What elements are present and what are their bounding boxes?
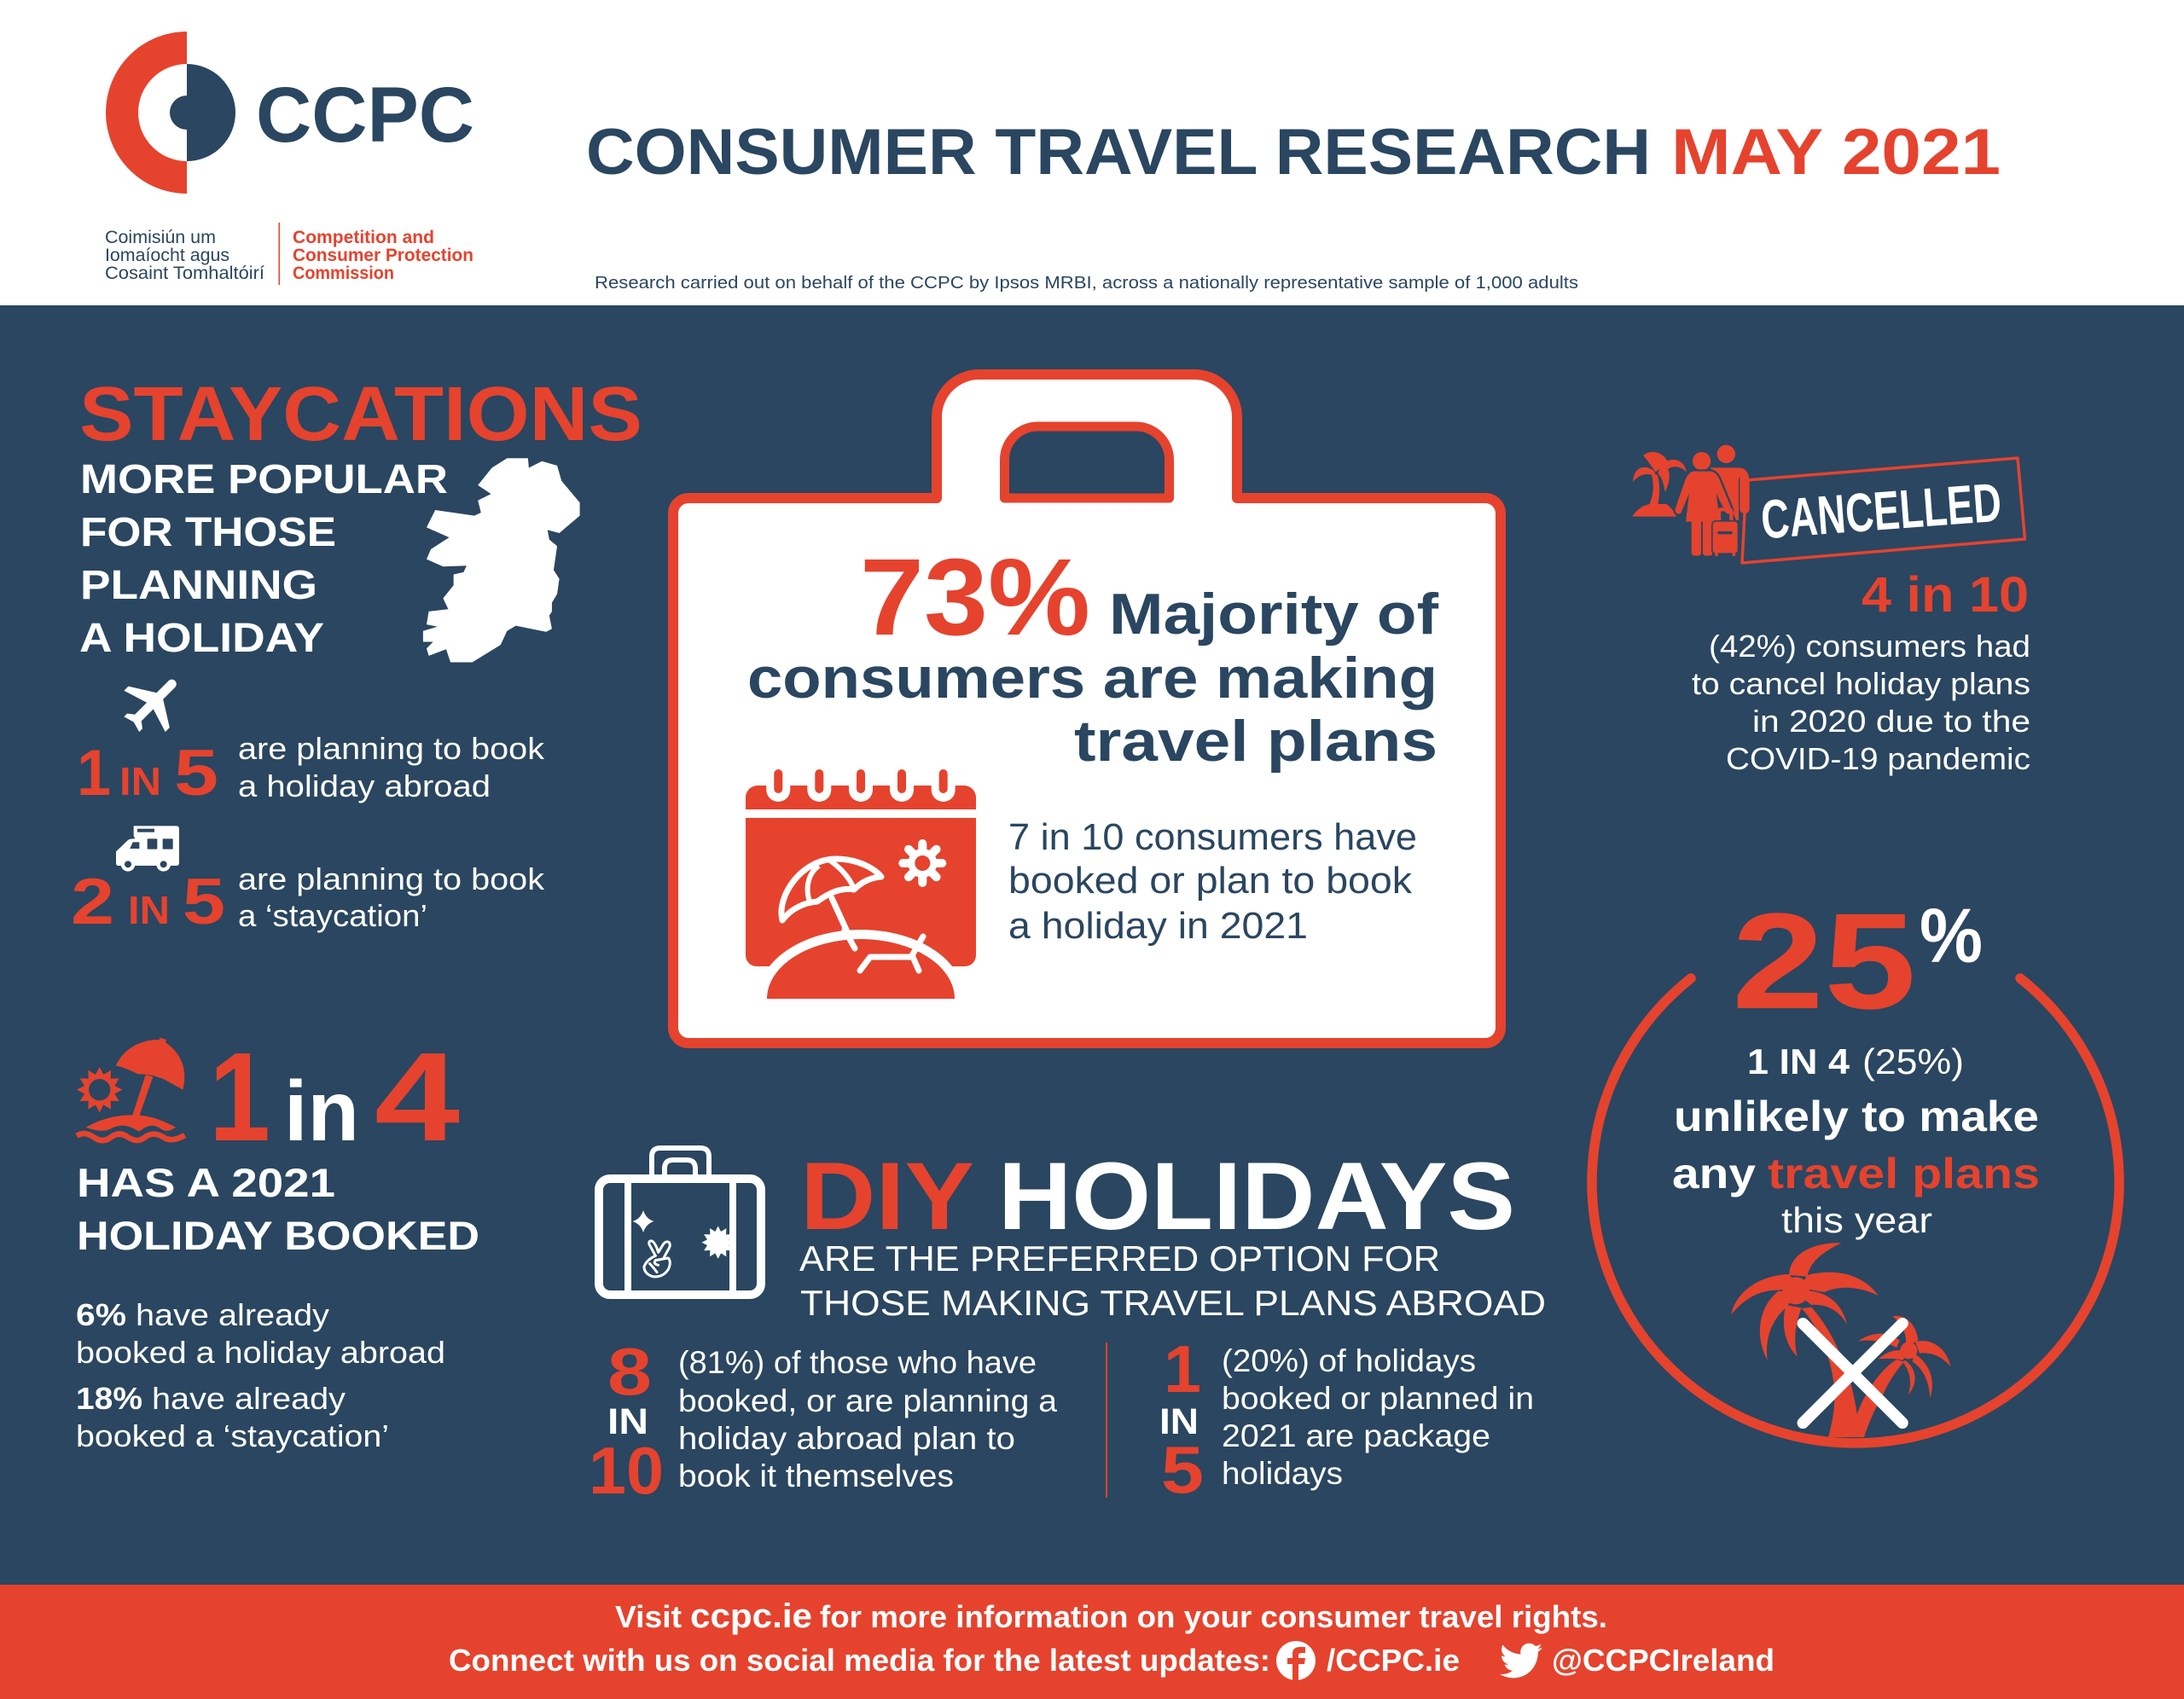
- stat: 4 in 10: 4 in 10: [1862, 567, 2029, 623]
- suitcase handle opening: [1005, 426, 1169, 498]
- text: unlikely to make travel plans: any: [1672, 1150, 1756, 1197]
- footer text: facebook handle: /CCPC.ie: [1327, 1643, 1460, 1678]
- stat: 1 in 5 abroad: IN: [119, 759, 161, 803]
- text: 6% and 18% booked: 6%: [76, 1297, 126, 1332]
- suitcase outline: [673, 374, 1501, 1043]
- text: 42% cancelled: in 2020 due to the: [1752, 704, 2030, 739]
- text: 42% cancelled: COVID-19 pandemic: [1726, 741, 2030, 776]
- text: 6% and 18% booked: 18%: [76, 1381, 142, 1416]
- text: unlikely to make travel plans: unlikely to make: [1674, 1093, 2039, 1140]
- icon: palm tree and travellers: [1632, 445, 1750, 556]
- heading: DIY holidays: [800, 1143, 1515, 1250]
- heading: has a 2021 holiday booked: [77, 1160, 479, 1258]
- stat: 1 in 5 abroad: 1: [77, 737, 111, 809]
- stat: 2 in 5 staycation: [71, 861, 545, 938]
- icon: twitter: [1500, 1644, 1542, 1678]
- ring arc: [1592, 978, 2119, 1443]
- text: 20% package holidays: booked or planned in: [1222, 1381, 1534, 1416]
- title: CONSUMER TRAVEL RESEARCH: [586, 116, 1651, 188]
- text: unlikely to make travel plans: 1 IN 4: [1747, 1041, 1850, 1081]
- text: 81% book themselves: booked, or are planning a: [678, 1383, 1057, 1418]
- icon: map of Ireland: [423, 458, 580, 663]
- text: 81% book themselves: holiday abroad plan to: [678, 1421, 1015, 1456]
- panel: suitcase 73%: [673, 374, 1501, 1043]
- stat: 8 in 10: 10: [589, 1433, 664, 1508]
- text: 81% book themselves: [678, 1345, 1057, 1493]
- icon: suitcase with stickers: [599, 1148, 761, 1296]
- stat: 1 in 5: [1159, 1331, 1204, 1507]
- logo: CCPC: [105, 32, 474, 285]
- heading: 73% majority: 73%: [860, 536, 1090, 658]
- stat: 1 in 5: 1: [1164, 1331, 1201, 1406]
- heading: 73% majority: [747, 536, 1438, 774]
- text: 20% package holidays: 2021 are package: [1222, 1418, 1490, 1453]
- research note: Research carried out on behalf of the CCPC by Ipsos MRBI, across a nationally representative sample of 1,000 adults: [595, 274, 1578, 293]
- stat: 8 in 10: 8: [607, 1334, 652, 1409]
- text: 81% book themselves: book it themselves: [678, 1458, 954, 1493]
- footer text: visit ccpc.ie: Visit: [615, 1599, 682, 1634]
- stat: 25%: [1732, 884, 1983, 1037]
- heading: DIY holidays: HOLIDAYS: [998, 1143, 1515, 1250]
- text: unlikely to make travel plans: this year: [1781, 1200, 1932, 1240]
- text: 6% and 18% booked: [76, 1297, 445, 1453]
- heading: staycations: STAYCATIONS: [79, 372, 642, 457]
- subheading: preferred option: [799, 1238, 1546, 1323]
- footer band: [0, 1585, 2184, 1699]
- stat: 8 in 10: IN: [607, 1401, 648, 1442]
- subheading: more popular: A HOLIDAY: [79, 616, 324, 661]
- logo: CCPC: Iomaíocht agus: [105, 246, 229, 265]
- text: unlikely to make travel plans: travel plans: [1768, 1150, 2040, 1197]
- stat: 1 in 5 abroad: a holiday abroad: [238, 768, 491, 803]
- icon: plane: [111, 660, 195, 745]
- title: MAY 2021: [1671, 116, 2001, 188]
- text: 6% and 18% booked: booked a holiday abroad: [76, 1335, 445, 1370]
- footer text: twitter handle: @CCPCIreland: [1552, 1643, 1774, 1678]
- panel: DIY holidays: [589, 1143, 1546, 1508]
- stat: 1 in 5: IN: [1159, 1401, 1199, 1442]
- icon: beach umbrella and sun: [77, 1038, 185, 1140]
- logo: CCPC: Consumer Protection: [293, 246, 473, 265]
- subheading: preferred option: THOSE MAKING TRAVEL PLANS ABROAD: [800, 1283, 1546, 1323]
- logo: CCPC: Coimisiún um: [105, 228, 216, 247]
- text: 6% and 18% booked: have already: [136, 1297, 329, 1332]
- text: 42% cancelled: to cancel holiday plans: [1692, 666, 2030, 701]
- text: 7 in 10 consumers: a holiday in 2021: [1008, 905, 1308, 947]
- text: 42% cancelled: [1692, 629, 2030, 776]
- text: 7 in 10 consumers: 7 in 10 consumers have: [1008, 816, 1417, 858]
- panel: cancelled: [1632, 445, 2030, 776]
- stat: 2 in 5 staycation: a ‘staycation’: [238, 898, 427, 933]
- stat: 1 in 4: [209, 1027, 460, 1168]
- stat: 2 in 5 staycation: IN: [128, 888, 170, 932]
- subheading: more popular: FOR THOSE: [80, 510, 336, 555]
- heading: 73% majority: consumers are making: [747, 646, 1438, 710]
- stat: 25%: 25: [1732, 884, 1916, 1037]
- icon: crossed-out palm trees: [1731, 1243, 1951, 1437]
- icon: facebook: [1276, 1641, 1316, 1680]
- heading: 73% majority: travel plans: [1074, 709, 1438, 774]
- text: 7 in 10 consumers: booked or plan to book: [1008, 860, 1413, 902]
- logo: CCPC: CCPC: [256, 72, 474, 159]
- text: 81% book themselves: (81%) of those who have: [678, 1345, 1037, 1380]
- stat: 2 in 5 staycation: are planning to book: [238, 861, 545, 896]
- panel: 1 in 4 booked: [76, 1027, 479, 1453]
- text: unlikely to make travel plans: (25%): [1862, 1041, 1964, 1081]
- subheading: more popular: PLANNING: [80, 563, 317, 608]
- text: 6% and 18% booked: booked a ‘staycation’: [76, 1418, 389, 1453]
- stat: 1 in 5 abroad: are planning to book: [238, 731, 545, 766]
- footer text: visit ccpc.ie: for more information on your consumer travel rights.: [820, 1599, 1607, 1634]
- text: 7 in 10 consumers: [1008, 816, 1417, 947]
- stat: 1 in 4: 4: [375, 1027, 460, 1168]
- footer text: connect: Connect with us on social media for the latest updates:: [449, 1643, 1270, 1678]
- heading: DIY holidays: DIY: [800, 1143, 974, 1250]
- text: unlikely to make travel plans: [1672, 1041, 2040, 1240]
- heading: has a 2021 holiday booked: HAS A 2021: [77, 1160, 335, 1205]
- stat: 1 in 5 abroad: [77, 731, 545, 809]
- panel: staycations: [71, 372, 642, 938]
- stat: 1 in 5 abroad: 5: [174, 737, 218, 809]
- stamp: cancelled: CANCELLED: [1759, 472, 2003, 550]
- logo: CCPC: Commission: [293, 264, 394, 283]
- heading: 73% majority: Majority of: [1109, 582, 1438, 647]
- stat: 8 in 10: [589, 1334, 664, 1508]
- stat: 2 in 5 staycation: 2: [71, 866, 114, 938]
- text: 20% package holidays: [1222, 1343, 1534, 1491]
- heading: has a 2021 holiday booked: HOLIDAY BOOKED: [77, 1213, 479, 1258]
- text: 42% cancelled: (42%) consumers had: [1709, 629, 2030, 664]
- footer text: visit ccpc.ie: ccpc.ie: [690, 1598, 812, 1635]
- logo: CCPC: Competition and: [293, 228, 434, 247]
- stat: 1 in 4: 1: [209, 1027, 270, 1168]
- header band: [0, 0, 2184, 305]
- subheading: more popular: MORE POPULAR: [80, 457, 448, 502]
- stat: 1 in 4: in: [284, 1064, 359, 1159]
- subheading: more popular: [79, 457, 448, 661]
- stat: 25%: %: [1920, 894, 1983, 979]
- text: 20% package holidays: (20%) of holidays: [1222, 1343, 1476, 1378]
- text: 20% package holidays: holidays: [1222, 1456, 1343, 1491]
- stamp: cancelled: [1742, 458, 2025, 563]
- subheading: preferred option: ARE THE PREFERRED OPTION FOR: [799, 1238, 1440, 1279]
- icon: camper van: [116, 826, 179, 872]
- icon: calendar with beach: [746, 774, 976, 999]
- panel: 25% unlikely: [1592, 884, 2119, 1443]
- stat: 2 in 5 staycation: 5: [183, 866, 225, 938]
- stat: 1 in 5: 5: [1161, 1432, 1204, 1507]
- logo: CCPC: Cosaint Tomhaltóirí: [105, 264, 264, 283]
- text: 6% and 18% booked: have already: [152, 1381, 346, 1416]
